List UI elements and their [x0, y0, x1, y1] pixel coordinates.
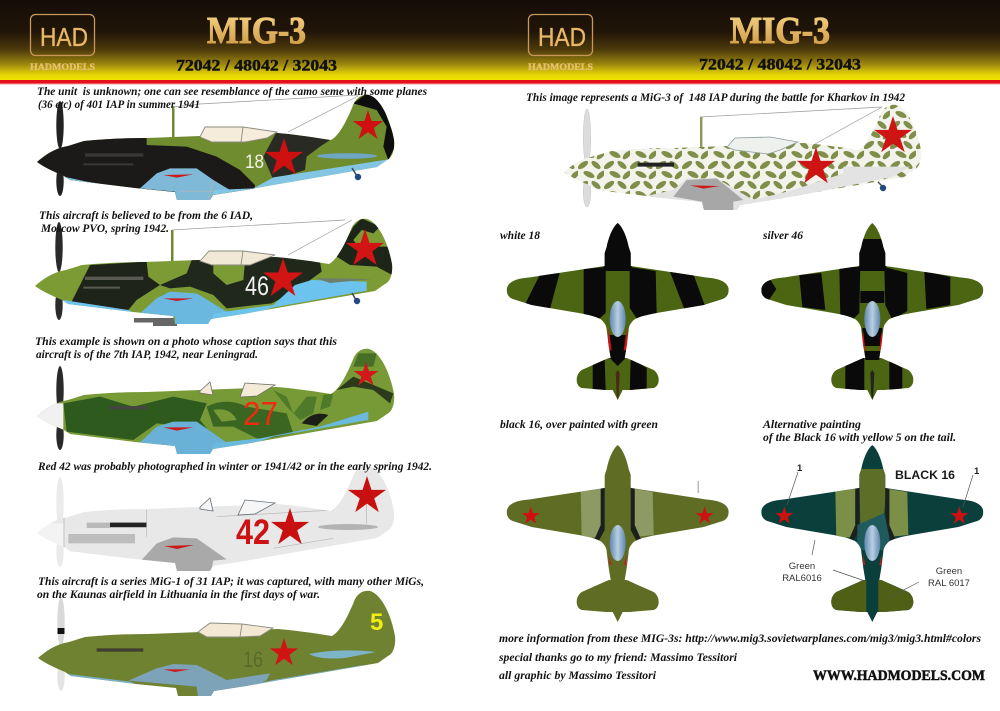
BLACK 16 annotation: BLACK 16 [895, 468, 955, 482]
antenna mast and wires [171, 220, 352, 261]
label: alternative painting: of the Black 16 with yellow 5 on the tail. [763, 432, 956, 444]
plane 6: snow camouflage side view [564, 104, 922, 210]
website: WWW.HADMODELS.COM [813, 668, 985, 684]
propeller [56, 101, 64, 196]
tail star [353, 110, 383, 139]
caption 2: Moscow PVO, spring 1942. [40, 223, 169, 235]
credits: all graphic by Massimo Tessitori [499, 670, 657, 682]
stabilizer [317, 153, 377, 159]
left logo: HAD: HAD [40, 22, 88, 52]
faint number 16: 16 [243, 647, 263, 672]
fuselage star [265, 138, 303, 174]
label: alternative painting [762, 419, 956, 444]
caption 5: This aircraft is a series MiG-1 of 31 IAP; it was captured, with many other MiGs, [38, 576, 424, 588]
left title: MIG-3 [207, 10, 306, 52]
right title: MIG-3 [730, 10, 830, 52]
caption 4: Red 42 was probably photographed in winter or 1941/42 or in the early spring 1942. [37, 461, 432, 473]
callout: Green RAL6016: Green [789, 561, 815, 572]
fuselage star [270, 638, 298, 665]
canopy [200, 498, 275, 515]
stabilizer [315, 278, 372, 283]
canopy [610, 525, 626, 561]
right logo: HAD: HADMODELS [528, 63, 593, 73]
fuselage star [797, 147, 835, 183]
plane 5: yellow 5 side view [38, 590, 396, 696]
left product codes: 72042 / 48042 / 32043 [176, 58, 337, 74]
tail star [354, 362, 378, 386]
canopy [864, 301, 880, 337]
fuselage star [271, 508, 309, 544]
label: black 16: black 16, over painted with green [500, 419, 658, 431]
label: silver 46: silver 46 [762, 230, 803, 242]
label: white 18: white 18 [500, 230, 540, 242]
number 46: 46 [245, 271, 269, 301]
tail wheel [878, 182, 886, 191]
canopy [864, 525, 880, 561]
callout: Green RAL 6017: RAL 6017 [928, 578, 970, 589]
wing arrow [164, 545, 194, 549]
rocket rail [134, 318, 178, 326]
tail wheel [352, 293, 360, 304]
wing star right [696, 506, 714, 524]
header band [0, 0, 1000, 84]
yellow number 5: 5 [370, 609, 383, 636]
fuselage paint [37, 348, 394, 454]
canopy [198, 623, 273, 637]
aerial [698, 481, 699, 493]
callout: Green RAL6016: RAL6016 [782, 573, 822, 584]
tail star [348, 476, 386, 512]
caption 5: on the Kaunas airfield in Lithuania in the first days of war. [37, 589, 320, 601]
canopy [200, 251, 275, 265]
credits: more information from these MIG-3s: http://www.mig3.sovietwarplanes.com/mig3/mig3.html#colors [499, 633, 982, 645]
plane 3: red 27 side view [37, 348, 394, 454]
caption 1: (36 etc) of 401 IAP in summer 1941 [38, 99, 200, 111]
callout numbers [797, 463, 980, 477]
number 18: 18 [245, 152, 264, 173]
number 42: 42 [236, 513, 270, 552]
canopy [610, 301, 626, 337]
caption 2: This aircraft is believed to be from the 6 IAD, [39, 210, 253, 222]
callout: Green RAL 6017 [928, 566, 970, 589]
top view: alternative black 16 [757, 443, 987, 625]
propeller [55, 222, 63, 320]
rudder [616, 370, 620, 400]
top view: black 16 overpainted [503, 443, 733, 625]
propeller [583, 109, 591, 207]
fuselage paint [38, 590, 396, 696]
right product codes: 72042 / 48042 / 32043 [699, 56, 861, 74]
callout: Green RAL 6017: Green [936, 566, 962, 577]
caption 3: This example is shown on a photo whose caption says that this [35, 336, 338, 348]
right logo: HAD: HAD [538, 22, 586, 52]
fuselage paint [564, 104, 922, 210]
number 27: 27 [243, 395, 278, 432]
callout numbers: 1 [797, 463, 803, 474]
top view: white 18 [503, 221, 733, 403]
propeller [56, 366, 64, 450]
caption 6: This image represents a MiG-3 of 148 IAP during the battle for Kharkov in 1942 [526, 92, 905, 104]
fuselage paint [35, 218, 392, 324]
propeller [57, 597, 65, 691]
callout: Green RAL6016 [782, 561, 822, 584]
caption 3: aircraft is of the 7th IAP, 1942, near Leningrad. [36, 349, 258, 361]
propeller [56, 477, 64, 567]
rudder [870, 370, 874, 400]
fuselage paint [30, 467, 403, 577]
caption 2 [39, 210, 253, 235]
callout numbers: 1 [974, 466, 980, 477]
wing star left [775, 506, 793, 524]
plane 1: white 18 side view [37, 94, 394, 200]
tail star [874, 116, 912, 152]
fuselage paint [37, 94, 394, 200]
fuselage star [263, 258, 303, 296]
canopy [200, 382, 275, 397]
credits: special thanks go to my friend: Massimo Tessitori [498, 652, 738, 664]
antenna mast and wires [172, 95, 358, 137]
top view: silver 46 [752, 221, 987, 403]
caption 1: The unit is unknown; one can see resemblance of the camo seme with some planes [37, 86, 428, 98]
label: alternative painting: Alternative painting [762, 419, 861, 431]
wing star right [950, 506, 968, 524]
antenna mast and wires [700, 107, 882, 147]
plane 2: silver 46 side view [35, 218, 392, 326]
plane 4: red 42 side view [30, 467, 403, 577]
caption 1 [37, 86, 428, 111]
caption 3 [35, 336, 338, 361]
stabilizer [309, 650, 376, 658]
stabilizer [318, 524, 378, 530]
canopy [727, 137, 798, 154]
left logo: HAD: HADMODELS [30, 63, 95, 73]
tail wheel [352, 168, 361, 180]
tail star [346, 229, 384, 265]
caption 5 [37, 576, 424, 601]
right logo: HAD [528, 14, 593, 73]
wing star left [522, 506, 540, 524]
credits [498, 633, 982, 682]
left logo: HAD [30, 14, 95, 73]
canopy [200, 127, 277, 142]
callout leader lines [787, 472, 973, 598]
